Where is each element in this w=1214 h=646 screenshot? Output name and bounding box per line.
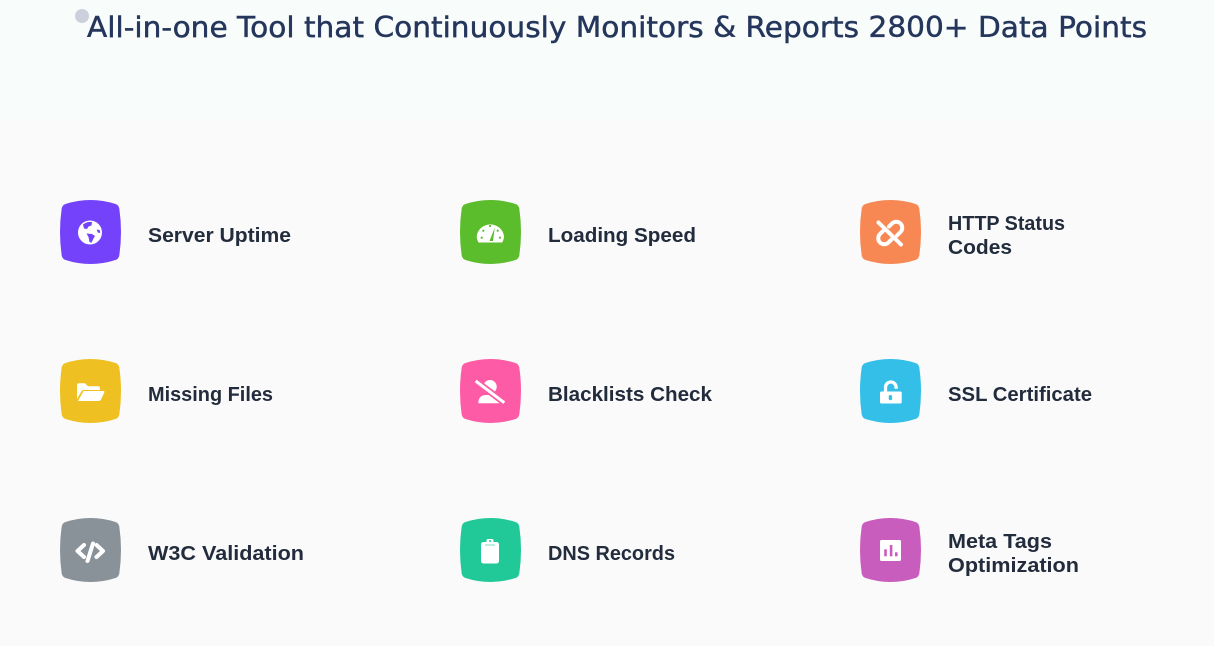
icon: chart — [860, 518, 921, 582]
label: W3C Validation — [148, 542, 304, 565]
icon: globe — [60, 200, 121, 264]
item: Meta Tags Optimization — [860, 518, 1079, 582]
label: Blacklists Check — [548, 383, 713, 406]
icon: clipboard — [460, 518, 521, 582]
item: Loading Speed — [460, 200, 696, 264]
icon: folder — [60, 359, 121, 423]
label: HTTP Status — [948, 212, 1065, 235]
label: Missing Files — [148, 383, 273, 406]
icon: broken link — [860, 200, 921, 264]
label: SSL Certificate — [948, 383, 1092, 406]
item: Meta Tags Optimization: Optimization — [948, 554, 1079, 577]
icon: gauge — [460, 200, 521, 264]
label: Loading Speed — [548, 224, 696, 247]
title: All-in-one Tool that Continuously Monitors & Reports 2800+ Data Points — [87, 11, 1147, 44]
label: Server Uptime — [148, 224, 291, 247]
label: Meta Tags — [948, 530, 1052, 553]
item: HTTP Status Codes: Codes — [948, 236, 1012, 259]
header band — [0, 0, 1214, 120]
icon: open lock — [860, 359, 921, 423]
item: DNS Records — [460, 518, 675, 582]
decorative dot — [75, 9, 89, 23]
icon: user slash — [460, 359, 521, 423]
item: SSL Certificate — [860, 359, 1092, 423]
label: DNS Records — [548, 542, 675, 565]
icon: code — [60, 518, 121, 582]
item: Blacklists Check — [460, 359, 713, 423]
item: HTTP Status Codes — [860, 200, 1065, 264]
item: Server Uptime — [60, 200, 291, 264]
item: Missing Files — [60, 359, 273, 423]
item: W3C Validation — [60, 518, 304, 582]
